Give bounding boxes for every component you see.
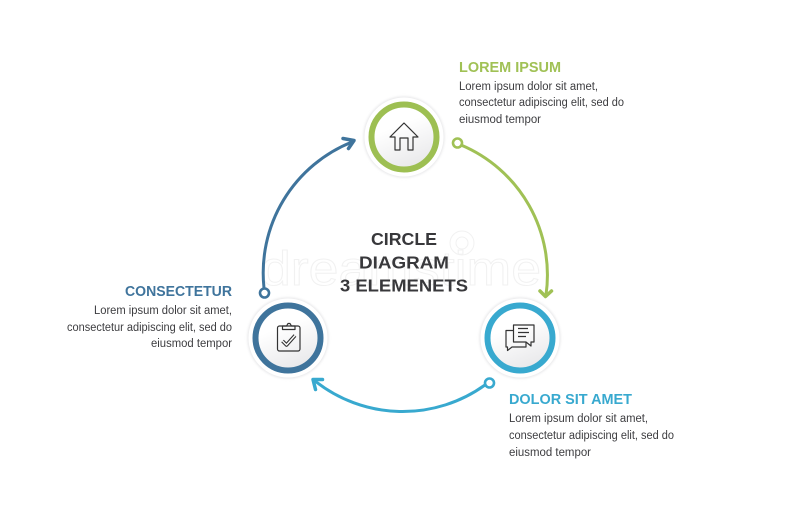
center title: 3 ELEMENETS	[340, 276, 468, 296]
text block: consectetur: Lorem ipsum dolor sit amet,	[94, 305, 232, 317]
center title: CIRCLE	[371, 229, 437, 249]
text block: lorem ipsum: LOREM IPSUM	[459, 60, 561, 76]
center title	[340, 229, 468, 296]
icon: clipboard	[278, 324, 300, 351]
text block: consectetur: eiusmod tempor	[151, 338, 232, 350]
text block: dolor sit amet	[509, 392, 674, 459]
node: teal speech bubbles	[480, 298, 560, 378]
text block: dolor sit amet: eiusmod tempor	[509, 447, 591, 459]
node: blue clipboard	[248, 298, 328, 378]
text block: dolor sit amet: DOLOR SIT AMET	[509, 392, 632, 408]
center title: DIAGRAM	[359, 252, 449, 272]
arrow: blue arc	[260, 138, 354, 298]
text block: lorem ipsum	[459, 60, 624, 126]
arrow: green arc	[453, 138, 552, 296]
text block: consectetur	[67, 284, 233, 350]
node: green house	[364, 96, 444, 178]
watermark: dreamstime	[261, 243, 541, 296]
icon: house	[390, 123, 418, 150]
text block: lorem ipsum: consectetur adipiscing elit, sed do	[459, 97, 624, 109]
text block: lorem ipsum: eiusmod tempor	[459, 114, 541, 126]
text block: dolor sit amet: Lorem ipsum dolor sit amet,	[509, 413, 648, 425]
icon: speech bubbles	[506, 325, 534, 350]
text block: consectetur: consectetur adipiscing elit, sed do	[67, 322, 232, 334]
text block: dolor sit amet: consectetur adipiscing elit, sed do	[509, 430, 674, 442]
text block: lorem ipsum: Lorem ipsum dolor sit amet,	[459, 81, 598, 93]
arrow: teal arc	[313, 378, 494, 412]
text block: consectetur: CONSECTETUR	[125, 284, 233, 300]
